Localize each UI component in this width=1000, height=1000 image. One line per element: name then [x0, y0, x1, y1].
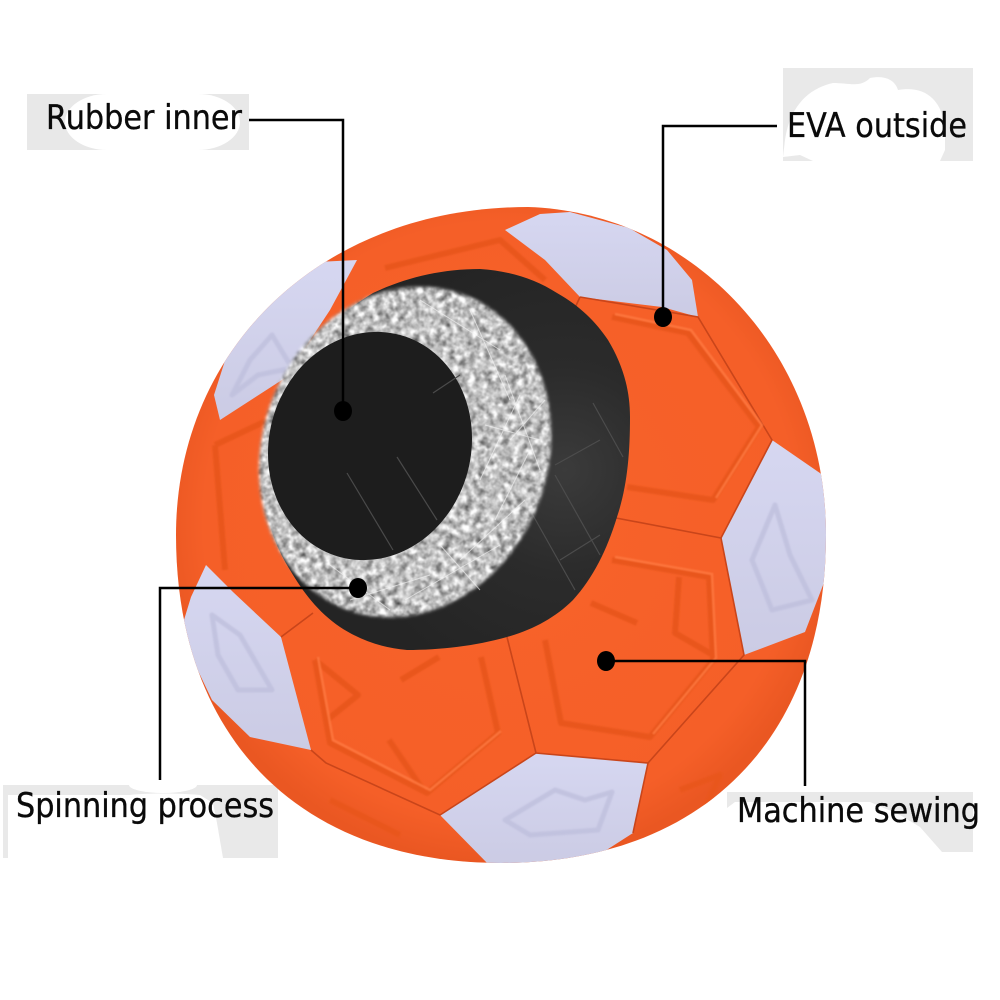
cutaway: inner black core	[243, 309, 497, 583]
ball body	[176, 207, 826, 863]
cutaway: spun fibre layer	[213, 245, 597, 659]
fibre strands	[330, 300, 545, 610]
shell grid lines	[530, 403, 623, 590]
leader: Machine sewing	[597, 651, 805, 786]
embossed stars on white panels	[212, 335, 812, 835]
label background: Machine sewing	[727, 792, 973, 852]
white panel: upper left	[214, 260, 357, 420]
white panel: top	[505, 212, 698, 317]
white panel: right	[721, 440, 830, 655]
white panel: lower left	[180, 565, 311, 750]
label background: Spinning process	[3, 777, 278, 858]
core highlights	[347, 375, 460, 550]
white panel: bottom	[440, 753, 648, 866]
label: Rubber inner: Rubber inner	[46, 98, 242, 138]
label: EVA outside: EVA outside	[787, 106, 967, 146]
cutaway: black rubber shell	[263, 269, 630, 650]
embossed panel outlines	[215, 240, 759, 835]
leader: EVA outside	[654, 126, 777, 327]
embossed highlights	[318, 314, 762, 790]
leader: Rubber inner	[249, 120, 352, 421]
football	[176, 207, 830, 866]
label background: EVA outside	[783, 68, 973, 161]
leader: Spinning process	[160, 578, 367, 780]
seam lines	[281, 297, 772, 833]
label: Spinning process: Spinning process	[16, 786, 274, 826]
label background: Rubber inner	[27, 94, 249, 150]
